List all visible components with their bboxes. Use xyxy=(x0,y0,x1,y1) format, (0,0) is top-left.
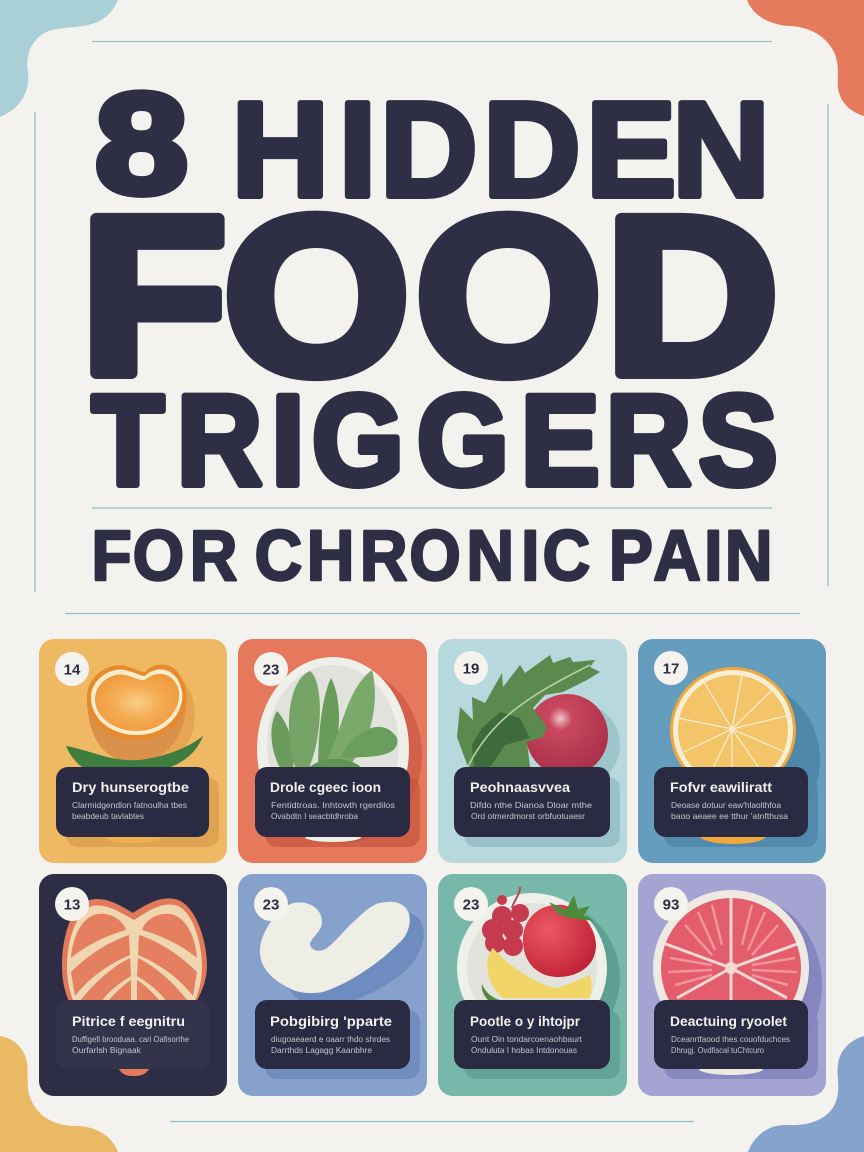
label heading: Peohnaasvvea xyxy=(470,780,571,795)
label text xyxy=(72,800,187,821)
number badge: 93 xyxy=(663,896,679,914)
label text: Fentidtroas. Inhtowth rgerdilos xyxy=(271,800,395,810)
icon: citrus slice xyxy=(670,667,820,836)
number badge xyxy=(454,887,488,921)
number badge: 17 xyxy=(663,660,679,678)
number badge: 23 xyxy=(463,896,479,914)
label text: baoo aeaee ee tthur 'atnfthusa xyxy=(671,811,788,821)
panel: card 5 dark xyxy=(39,874,227,1096)
label heading: Pootle o y ihtojpr xyxy=(470,1014,581,1029)
label text xyxy=(671,800,788,821)
plate rim below label xyxy=(699,1063,763,1075)
number badge xyxy=(55,887,89,921)
label box xyxy=(654,1000,808,1069)
citrus rind below label xyxy=(700,828,766,844)
icon: orange slice on leaves xyxy=(66,665,203,772)
panel: card 8 lavender xyxy=(638,874,826,1096)
label shadow xyxy=(66,777,219,847)
title xyxy=(81,64,779,596)
label text: Clarmidgendlon fatnoulha tbes xyxy=(72,800,187,810)
panel: card 4 blue xyxy=(638,639,826,863)
panel: card 7 teal xyxy=(438,874,627,1096)
label box xyxy=(454,767,610,837)
meat tip below label xyxy=(119,1069,149,1076)
orange base below label xyxy=(105,831,161,843)
title line: 8 HIDDEN: HIDDEN xyxy=(232,74,770,225)
label box xyxy=(56,767,209,837)
label text: Ovabdtn I seacbtdhroba xyxy=(271,811,358,821)
number badge: 13 xyxy=(64,896,80,914)
label shadow xyxy=(265,777,420,847)
label text: Ord otmerdmorst orbfuotuaesr xyxy=(471,811,585,821)
title line: FOR CHRONIC PAIN: FOR CHRONIC PAIN xyxy=(91,516,773,596)
label text: Duffigefi brooduaa. cari Oafisorthe xyxy=(72,1034,189,1044)
number badge xyxy=(454,651,488,685)
label text: Dceanrtfaood thes couofduchces xyxy=(671,1034,790,1044)
number badge: 23 xyxy=(263,662,279,678)
corner blob: top left xyxy=(0,0,118,117)
corner blob: top right xyxy=(747,0,864,116)
label heading: Pitrice f eegnitru xyxy=(72,1014,185,1029)
label text: Ourfarlsh Bignaak xyxy=(72,1045,142,1055)
panel: card 6 periwinkle xyxy=(238,874,427,1096)
label text xyxy=(271,800,395,821)
number badge: 23 xyxy=(263,896,279,914)
label box xyxy=(255,1000,410,1069)
number badge xyxy=(254,652,288,686)
icon: plate of green leaves xyxy=(257,657,422,843)
label text xyxy=(471,1034,583,1055)
number badge: 14 xyxy=(64,662,81,678)
label text: diugoaeaerd e oaarr thdo shrdes xyxy=(271,1034,390,1044)
number badge: 19 xyxy=(463,660,479,678)
label box xyxy=(654,767,808,837)
number badge xyxy=(654,651,688,685)
number badge xyxy=(55,652,89,686)
label text: beabdeub tavlabtes xyxy=(72,811,144,821)
icon: herb leaf and red fruit xyxy=(457,655,620,787)
title line: TRIGGERS: TRIGGERS xyxy=(92,370,777,513)
number badge xyxy=(254,887,288,921)
label heading: Dry hunserogtbe xyxy=(72,780,190,795)
label shadow xyxy=(664,777,818,847)
label text xyxy=(470,800,592,821)
label text xyxy=(72,1034,189,1055)
label shadow xyxy=(464,777,620,847)
label heading: Fofvr eawiliratt xyxy=(670,780,773,795)
panel: card 3 pale blue xyxy=(438,639,627,863)
label text xyxy=(671,1034,790,1055)
label box xyxy=(255,767,410,837)
label heading: Drole cgeec ioon xyxy=(270,780,381,795)
plate rim below label xyxy=(305,832,361,842)
number badge xyxy=(654,887,688,921)
corner blob: bottom left xyxy=(0,1036,118,1152)
label text: Darrthds Lagagg Kaanbhre xyxy=(271,1045,372,1055)
panel: card 2 coral xyxy=(238,639,427,863)
label text: Ount Oin tondarcoenaohbaurt xyxy=(471,1034,583,1044)
title line: FOOD: FOOD xyxy=(81,171,779,421)
label box xyxy=(454,1000,610,1069)
icon: white bean shape xyxy=(260,902,424,1008)
label shadow xyxy=(664,1010,818,1079)
label shadow xyxy=(464,1010,620,1079)
label text: Deoase dotuur eaw'hlaolthfoa xyxy=(671,800,781,810)
label shadow xyxy=(265,1010,420,1079)
label text: Onduluta I hobas Intdonouas xyxy=(471,1045,577,1055)
label text xyxy=(271,1034,390,1055)
icon: grapefruit slice xyxy=(653,890,822,1017)
icon: plate with berries, tomato and lemon xyxy=(457,887,620,1056)
icon: cut of meat xyxy=(62,898,207,1076)
label text: Dhrugj. Ovdfiscal tuChtcuro xyxy=(671,1045,764,1055)
title line: 8 HIDDEN: 8 xyxy=(95,64,188,223)
corner blob: bottom right xyxy=(748,1036,864,1152)
label heading: Deactuing ryoolet xyxy=(670,1014,788,1029)
label text: Difdo nthe Dianoa Dloar mthe xyxy=(470,800,592,810)
label heading: Pobgibirg 'pparte xyxy=(270,1014,393,1029)
label box xyxy=(56,1000,210,1069)
panel: card 1 orange xyxy=(39,639,227,863)
